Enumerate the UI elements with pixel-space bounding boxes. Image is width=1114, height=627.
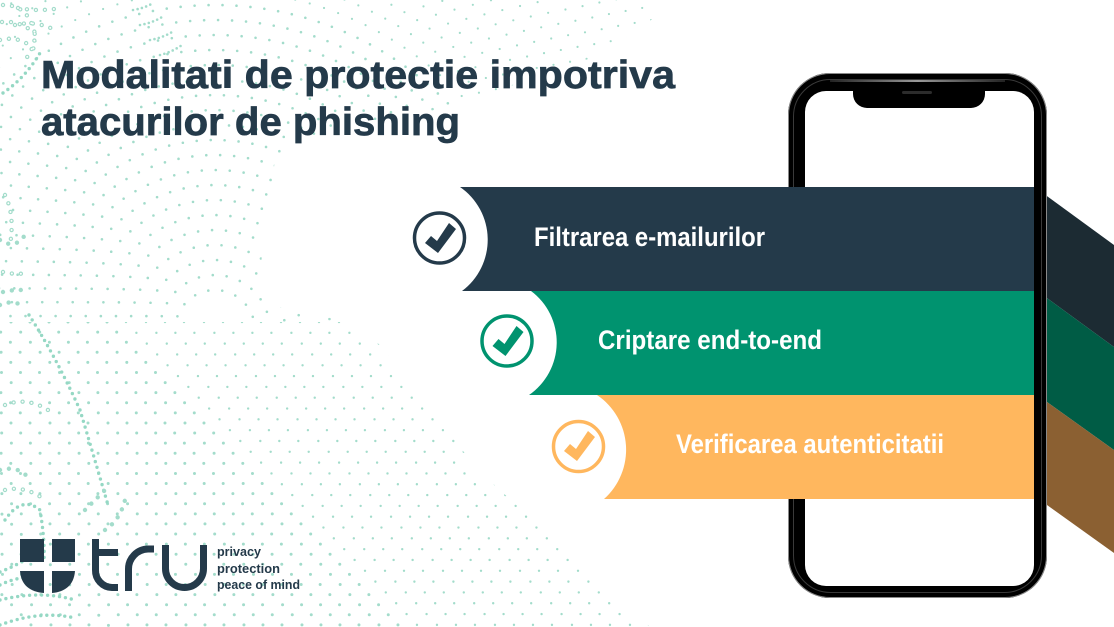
logo shield [20,539,75,593]
title: atacurilor de phishing [41,101,460,144]
side shadow stripes [1040,191,1114,553]
logo tagline [217,544,300,592]
band: Verificarea autenticitatii: Verificarea autenticitatii [676,429,944,459]
logo wordmark [92,539,204,591]
background dot pattern [0,0,750,627]
logo [20,539,300,593]
band: Criptare end-to-end [529,291,1034,395]
band: Criptare end-to-end: Criptare end-to-end [598,325,822,355]
smartphone [788,73,1047,598]
icon: navy check [414,213,464,263]
icon: orange check [554,422,604,472]
icon: green check [482,316,532,366]
band: Filtrarea e-mailurilor [460,187,1034,291]
band: Verificarea autenticitatii [597,395,1034,499]
band: Filtrarea e-mailurilor: Filtrarea e-mailurilor [534,222,765,252]
logo tagline: peace of mind [217,577,300,592]
title: Modalitati de protectie impotriva [41,54,675,97]
logo tagline: protection [217,561,280,576]
logo tagline: privacy [217,544,262,559]
title [41,54,675,144]
